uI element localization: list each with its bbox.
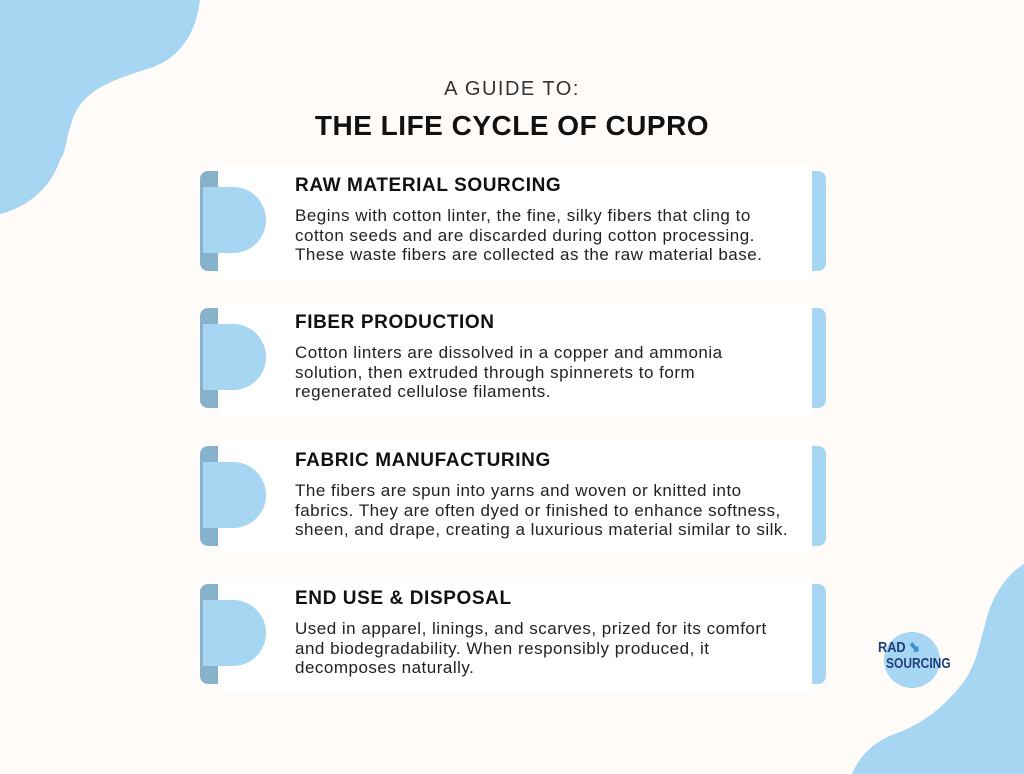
panel: fabric manufacturing: sheen, and drape, creating a luxurious material similar to silk. [295, 520, 788, 539]
panel: end use & disposal: decomposes naturally. [295, 658, 474, 677]
panel: end use & disposal: END USE & DISPOSAL [295, 588, 512, 609]
panel: fiber production [200, 308, 826, 408]
logo: rad sourcing: RAD ⬊ [878, 639, 920, 656]
panel: raw material sourcing [200, 171, 826, 271]
panel: raw material sourcing: These waste fibers are collected as the raw material base. [295, 245, 762, 264]
panel: fiber production: FIBER PRODUCTION [295, 312, 495, 333]
subtitle: A GUIDE TO: [444, 78, 580, 100]
panel: raw material sourcing: cotton seeds and are discarded during cotton processing. [295, 226, 755, 244]
panel: fabric manufacturing: fabrics. They are often dyed or finished to enhance softness, [295, 500, 781, 520]
panel: end use & disposal: and biodegradability. When responsibly produced, it [295, 638, 710, 658]
logo: rad sourcing: SOURCING [886, 655, 951, 672]
panel: raw material sourcing: RAW MATERIAL SOURCING [295, 175, 561, 196]
title: THE LIFE CYCLE OF CUPRO [315, 110, 709, 141]
logo: rad sourcing [878, 632, 951, 688]
panel: end use & disposal: Used in apparel, linings, and scarves, prized for its comfort [295, 619, 767, 638]
panel: fiber production: regenerated cellulose filaments. [295, 382, 551, 401]
panel: fiber production: Cotton linters are dissolved in a copper and ammonia [295, 343, 723, 362]
panel: raw material sourcing: Begins with cotton linter, the fine, silky fibers that cling to [295, 206, 751, 225]
panel: end use & disposal [200, 584, 826, 684]
panel: fabric manufacturing: The fibers are spun into yarns and woven or knitted into [295, 481, 742, 500]
panel: fabric manufacturing: FABRIC MANUFACTURING [295, 450, 551, 471]
blob: bottom-right decoration [852, 564, 1024, 774]
panel: fabric manufacturing [200, 446, 826, 546]
blob: top-left decoration [0, 0, 200, 214]
panel: fiber production: solution, then extruded through spinnerets to form [295, 362, 695, 382]
